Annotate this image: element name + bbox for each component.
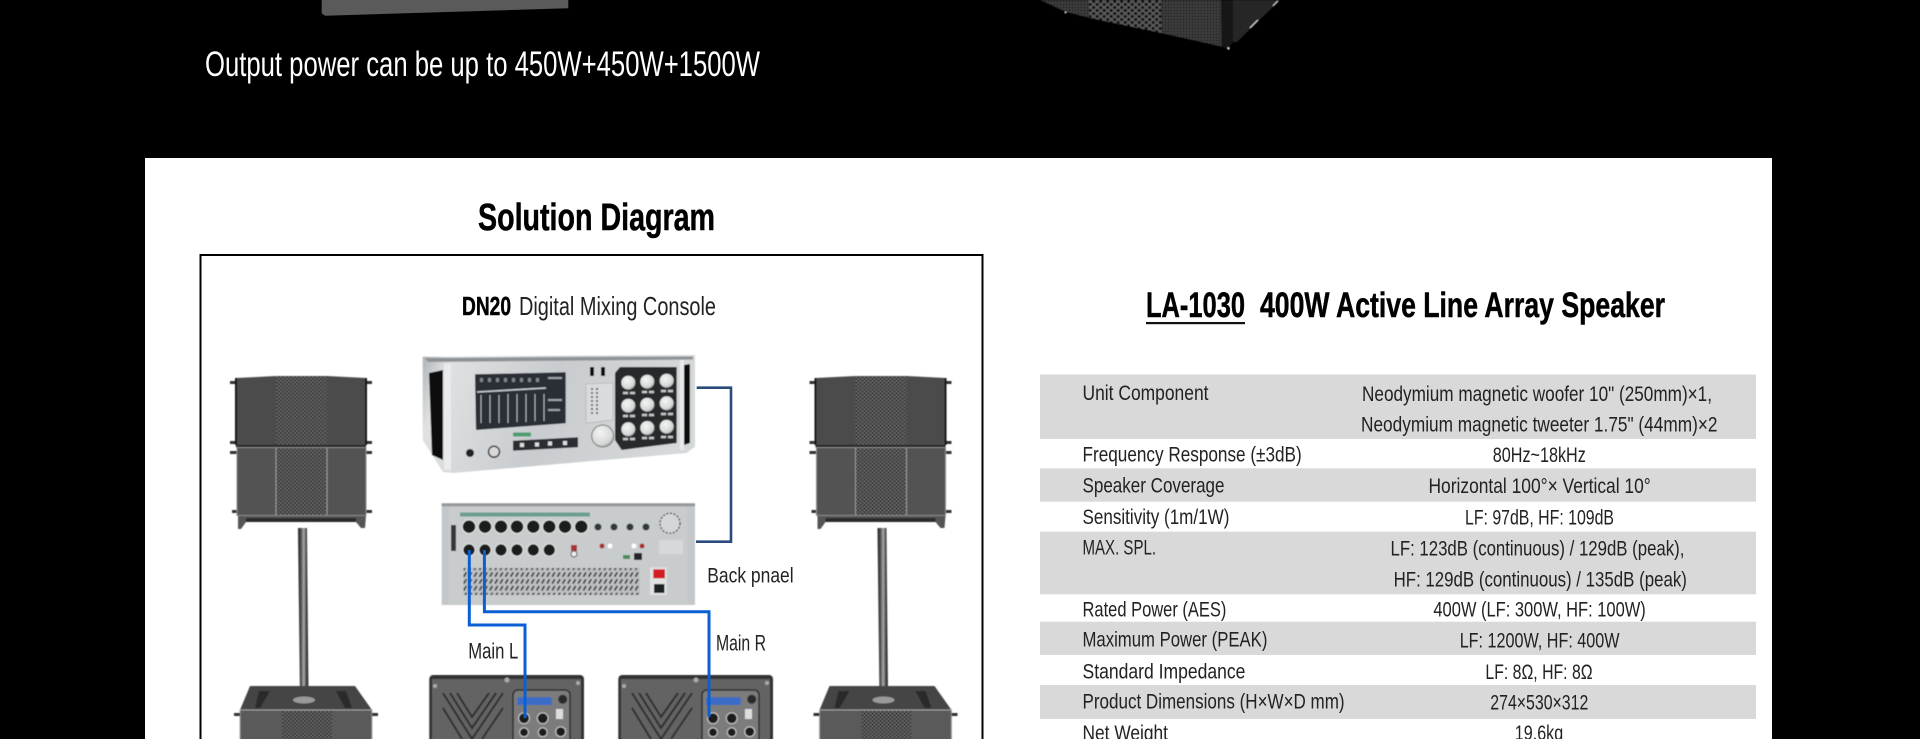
- label: Main L: Main L: [468, 638, 518, 663]
- diagram heading: DN20 Digital Mixing Console: [462, 291, 716, 321]
- row: Product Dimensions: 274×530×312: [1490, 692, 1588, 715]
- panel: white content card: [145, 158, 1772, 739]
- icon: right line array speakers on pole with subwoofer: [810, 376, 958, 739]
- row: Speaker Coverage: [1040, 468, 1756, 502]
- row: Maximum Power: [1040, 622, 1756, 655]
- row: Standard Impedance: Standard Impedance: [1082, 660, 1245, 683]
- row: Product Dimensions: Product Dimensions (H×W×D mm): [1082, 690, 1345, 713]
- row: Speaker Coverage: Horizontal 100°× Vertical 10°: [1428, 475, 1651, 498]
- row: Standard Impedance: LF: 8Ω, HF: 8Ω: [1485, 661, 1593, 684]
- row: Sensitivity: Sensitivity (1m/1W): [1082, 506, 1229, 529]
- row: Frequency Response: 80Hz~18kHz: [1493, 444, 1586, 467]
- row: Speaker Coverage: Speaker Coverage: [1082, 474, 1224, 497]
- row: Maximum Power: LF: 1200W, HF: 400W: [1460, 629, 1620, 652]
- icon: left line array speakers on pole with subwoofer: [230, 376, 378, 739]
- arrow: Main L blue cable: [469, 550, 525, 718]
- row: Net Weight: [1082, 722, 1563, 739]
- row: Frequency Response: [1082, 444, 1586, 467]
- row: MAX. SPL.: MAX. SPL.: [1082, 536, 1156, 559]
- heading: LA-1030 400W Active Line Array Speaker: [1146, 286, 1665, 325]
- row: Rated Power: Rated Power (AES): [1082, 598, 1226, 621]
- product image: line array speaker bottom: [1040, 0, 1280, 50]
- row: Rated Power: 400W (LF: 300W, HF: 100W): [1433, 598, 1646, 621]
- diagram heading: DN20 Digital Mixing Console: DN20: [462, 291, 511, 321]
- icon: DN20 mixer back panel: [442, 503, 695, 605]
- arrow: Main R blue cable: [484, 550, 709, 717]
- row: Unit Component: Unit Component: [1082, 382, 1209, 405]
- label: Main R: Main R: [716, 631, 766, 656]
- label: Back pnael: Back pnael: [707, 564, 794, 587]
- caption: output power: Output power can be up to 450W+450W+1500W: [205, 45, 760, 84]
- arrow: navy connection between front and back panel: [696, 388, 731, 542]
- row: Sensitivity: LF: 97dB, HF: 109dB: [1465, 507, 1614, 530]
- row: Unit Component: Neodymium magnetic woofer 10" (250mm)×1,: [1362, 383, 1712, 406]
- row: Product Dimensions: [1040, 685, 1756, 719]
- heading: LA-1030 400W Active Line Array Speaker: LA-1030: [1146, 286, 1245, 325]
- diagram heading: DN20 Digital Mixing Console: Digital Mixing Console: [519, 291, 716, 321]
- row: Maximum Power: Maximum Power (PEAK): [1082, 629, 1267, 652]
- row: Frequency Response: Frequency Response (±3dB): [1082, 444, 1302, 467]
- icon: left active subwoofer back panel: [429, 675, 584, 739]
- row: MAX. SPL.: HF: 129dB (continuous) / 135dB (peak): [1394, 568, 1687, 591]
- row: MAX. SPL.: [1040, 532, 1756, 594]
- row: Rated Power: [1082, 598, 1646, 621]
- icon: right active subwoofer back panel: [618, 675, 773, 739]
- heading: LA-1030 400W Active Line Array Speaker: 400W Active Line Array Speaker: [1260, 286, 1665, 325]
- heading: Solution Diagram: Solution Diagram: [478, 197, 715, 239]
- row: Unit Component: Neodymium magnetic tweeter 1.75" (44mm)×2: [1361, 413, 1718, 436]
- row: Sensitivity: [1082, 506, 1614, 530]
- icon: DN20 mixer front panel: [423, 355, 695, 473]
- product image: amplifier bottom edge: [322, 0, 568, 16]
- table: specifications: [1040, 374, 1756, 739]
- panel: solution diagram frame: [200, 255, 982, 739]
- row: MAX. SPL.: LF: 123dB (continuous) / 129dB (peak),: [1390, 538, 1684, 561]
- row: Unit Component: [1040, 374, 1756, 439]
- row: Standard Impedance: [1082, 660, 1593, 684]
